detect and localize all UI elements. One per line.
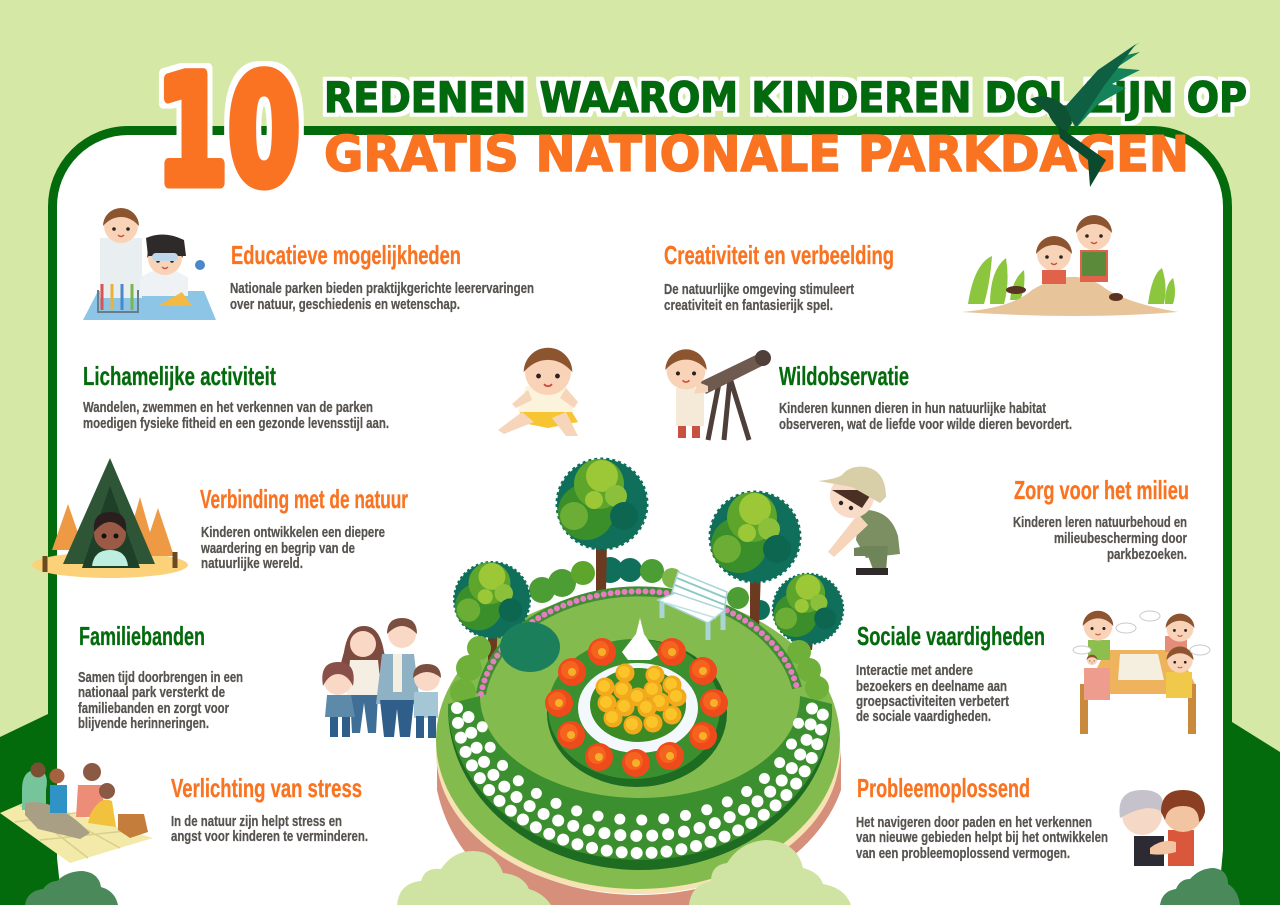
heading and text: Wildobservatie: observeren, wat de liefde voor wilde dieren bevordert. <box>779 416 1072 433</box>
heading and text: Verlichting van stress: In de natuur zijn helpt stress en <box>171 813 342 830</box>
icon: explorer child <box>818 467 900 575</box>
heading and text: Familiebanden <box>78 621 243 732</box>
light green bush: bottom centre-left <box>397 851 551 905</box>
panel bottom-left green corner <box>0 820 62 905</box>
yellow flowers <box>596 664 686 734</box>
heading and text: Probleemoplossend: Probleemoplossend <box>857 773 1030 803</box>
dark green bush: bottom left <box>25 871 118 905</box>
heading and text: Zorg voor het milieu: Zorg voor het milieu <box>1014 475 1189 505</box>
white rounded content panel <box>52 130 1228 905</box>
light green bush: bottom centre-right <box>689 840 851 905</box>
red roses <box>545 638 728 777</box>
plants <box>968 256 1175 304</box>
heading and text: Zorg voor het milieu: Kinderen leren natuurbehoud en <box>1013 514 1187 531</box>
tent <box>63 458 155 564</box>
sand mound <box>962 277 1178 316</box>
bench <box>658 572 727 640</box>
icon: scientists at table <box>83 208 216 320</box>
heading and text: Familiebanden: nationaal park versterkt de <box>78 684 225 701</box>
scientist with goggles <box>140 269 188 296</box>
heading and text: Lichamelijke activiteit: moedigen fysieke fitheid en een gezonde levensstijl aan. <box>83 415 389 432</box>
panel bottom-right green corner <box>1218 830 1280 905</box>
heading and text: Educatieve mogelijkheden <box>230 240 534 313</box>
children <box>1088 640 1110 660</box>
icon: child in tent <box>32 458 188 578</box>
tree shadow on lawn <box>500 622 560 672</box>
icon: child with telescope <box>665 349 771 440</box>
heading and text: Creativiteit en verbeelding <box>664 240 894 314</box>
heading and text: Educatieve mogelijkheden: Educatieve mogelijkheden <box>231 240 461 270</box>
heading and text: Familiebanden: blijvende herinneringen. <box>78 715 209 732</box>
tree: right <box>773 574 843 650</box>
heading and text: Creativiteit en verbeelding: creativiteit en fantasierijk spel. <box>664 297 833 314</box>
platform rim <box>436 610 840 894</box>
heading and text: Familiebanden: familiebanden en zorgt voor <box>78 700 229 717</box>
heading and text: Sociale vaardigheden: bezoekers en deelname aan <box>856 678 1007 695</box>
heading and text: Probleemoplossend <box>856 773 1108 862</box>
blanket <box>0 800 153 863</box>
father <box>376 654 420 704</box>
heading and text: Familiebanden: Samen tijd doorbrengen in een <box>78 669 243 686</box>
icon: family of four <box>322 618 441 738</box>
icon: family picnic <box>0 762 153 863</box>
heading and text: Sociale vaardigheden: groepsactiviteiten verbetert <box>856 693 1009 710</box>
heading and text: Zorg voor het milieu: milieubescherming door <box>1054 530 1187 547</box>
ground <box>32 552 188 578</box>
son <box>414 692 438 718</box>
man <box>22 770 47 810</box>
woman <box>76 785 105 817</box>
scientist standing <box>100 238 142 298</box>
central bed <box>547 639 727 787</box>
heading and text: Verlichting van stress: Verlichting van stress <box>171 773 362 803</box>
orange pines <box>52 497 174 556</box>
icon: sitting child <box>498 348 578 436</box>
heading and text: Wildobservatie <box>779 361 1072 433</box>
heading and text: Wildobservatie: Wildobservatie <box>779 361 909 391</box>
heading and text: Verbinding met de natuur: natuurlijke wereld. <box>201 555 303 572</box>
heading and text: Sociale vaardigheden: Interactie met andere <box>856 662 973 679</box>
heading and text: Verlichting van stress <box>171 773 368 845</box>
heading and text: Creativiteit en verbeelding: Creativiteit en verbeelding <box>664 240 894 270</box>
heading and text: Probleemoplossend: Het navigeren door paden en het verkennen <box>856 814 1092 831</box>
heading and text: Verbinding met de natuur <box>200 484 408 572</box>
heading and text: Lichamelijke activiteit: Wandelen, zwemmen en het verkennen van de parken <box>83 399 373 416</box>
hedge back <box>529 557 770 620</box>
pink flower border <box>481 591 797 694</box>
icon: kids at table with speech bubbles <box>1073 611 1210 734</box>
heading and text: Verbinding met de natuur: Kinderen ontwikkelen een diepere <box>201 524 385 541</box>
heading and text: Wildobservatie: Kinderen kunnen dieren in hun natuurlijke habitat <box>779 400 1046 417</box>
heading and text: Probleemoplossend: van nieuwe gebieden helpt bij het ontwikkelen <box>856 829 1108 846</box>
heading and text: Probleemoplossend: van een probleemoplossend vermogen. <box>856 845 1070 862</box>
icon: two people helping <box>1119 790 1205 866</box>
tree: back left <box>557 459 647 592</box>
title number 10: 10 <box>156 45 300 219</box>
heading and text: Zorg voor het milieu: parkbezoeken. <box>1107 546 1187 563</box>
heading and text: Lichamelijke activiteit <box>83 361 389 432</box>
hedge sides <box>450 636 829 705</box>
table <box>83 291 216 320</box>
title <box>156 45 1247 219</box>
child <box>92 550 128 566</box>
heading and text: Creativiteit en verbeelding: De natuurlijke omgeving stimuleert <box>664 281 854 298</box>
heading and text: Educatieve mogelijkheden: Nationale parken bieden praktijkgerichte leerervaringen <box>230 280 534 297</box>
central garden illustration <box>436 459 843 905</box>
white flower hedge <box>448 696 832 870</box>
platform underside <box>437 745 841 905</box>
icon: kids at sand mound <box>962 215 1178 316</box>
tree: left <box>454 562 530 666</box>
heading and text: Sociale vaardigheden: Sociale vaardigheden <box>857 621 1045 651</box>
boy <box>50 785 67 813</box>
lawn <box>436 591 840 889</box>
heading and text: Verbinding met de natuur: waardering en begrip van de <box>200 540 355 557</box>
girl <box>88 800 116 827</box>
mother <box>338 626 390 674</box>
heading and text: Familiebanden: Familiebanden <box>79 621 205 651</box>
white ring <box>578 663 698 753</box>
daughter <box>325 695 355 717</box>
icon: green bird <box>1030 42 1140 187</box>
basket <box>118 814 148 838</box>
title line two: GRATIS NATIONALE PARKDAGEN <box>324 126 1189 183</box>
heading and text: Sociale vaardigheden <box>856 621 1045 725</box>
heading and text: Sociale vaardigheden: de sociale vaardigheden. <box>856 708 991 725</box>
heading and text: Verbinding met de natuur: Verbinding met de natuur <box>200 484 408 514</box>
dark green hills <box>0 714 1280 905</box>
speech bubbles <box>1073 611 1210 655</box>
tree: back right <box>710 492 800 630</box>
heading and text: Educatieve mogelijkheden: over natuur, geschiedenis en wetenschap. <box>230 296 460 313</box>
heading and text: Verlichting van stress: angst voor kinderen te verminderen. <box>171 828 368 845</box>
heading and text: Zorg voor het milieu <box>1013 475 1189 563</box>
heading and text: Lichamelijke activiteit: Lichamelijke activiteit <box>83 361 276 391</box>
table <box>1088 650 1196 686</box>
spire <box>622 618 658 660</box>
dark green bush: bottom right <box>1160 868 1240 905</box>
test tubes <box>102 284 132 310</box>
